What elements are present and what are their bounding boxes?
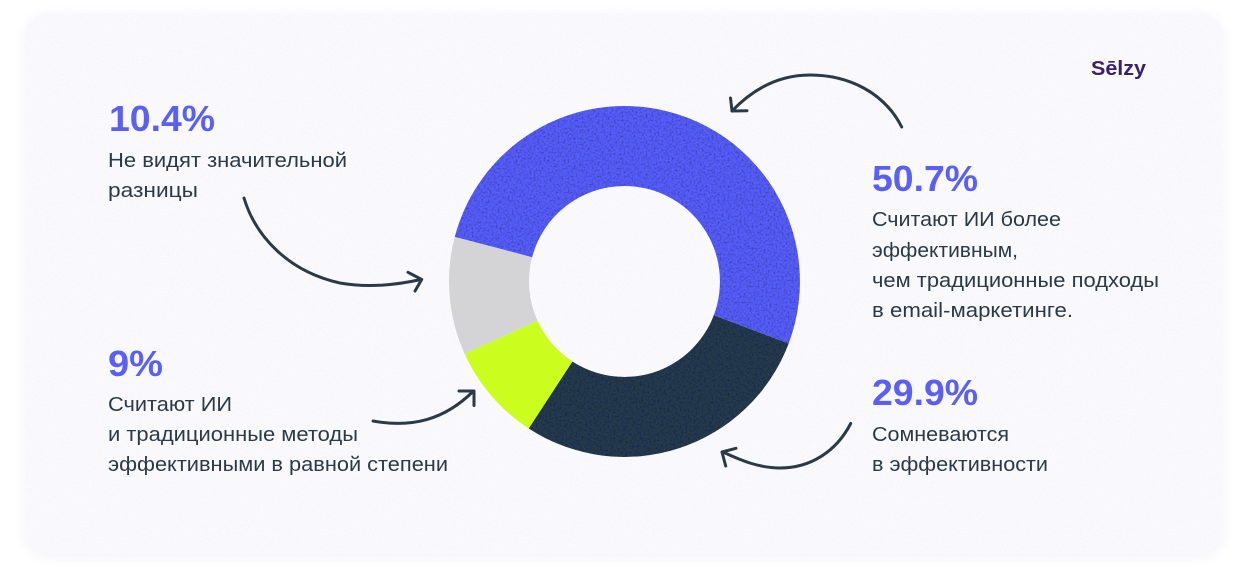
arrow: 29.9% to dark segment	[722, 424, 851, 468]
text block: 9%: эффективными в равной степени	[108, 454, 448, 476]
segment: 9% lime	[465, 321, 572, 428]
text block: 50.7%: в email-маркетинге.	[872, 300, 1073, 322]
text block: 50.7%: эффективным,	[872, 240, 1018, 262]
text block: 50.7%: 50.7%	[872, 158, 978, 199]
text block: 9%	[108, 343, 448, 476]
text block: 50.7%: чем традиционные подходы	[872, 270, 1159, 292]
text block: 10.4%	[108, 98, 347, 202]
text block: 9%: 9%	[108, 343, 163, 384]
arrow: 10.4% to grey segment	[244, 198, 422, 291]
text block: 10.4%: разницы	[108, 180, 198, 202]
segment: 50.7% blue	[455, 106, 800, 344]
text block: 9%: Считают ИИ	[108, 394, 232, 416]
logo: Selzy: Sēlzy	[1091, 58, 1147, 80]
arrow: 9% to lime segment	[373, 391, 474, 423]
text block: 29.9%: в эффективности	[872, 454, 1048, 476]
text block: 29.9%: 29.9%	[872, 372, 978, 413]
text block: 10.4%: Не видят значительной	[108, 150, 347, 172]
segment: 29.9% dark	[529, 315, 789, 457]
text block: 50.7%: Считают ИИ более	[872, 209, 1061, 231]
text block: 29.9%	[872, 372, 1048, 476]
segment: 10.4% grey	[449, 237, 538, 354]
text block: 10.4%: 10.4%	[109, 98, 215, 139]
text block: 50.7%	[872, 158, 1159, 322]
donut chart	[449, 106, 800, 457]
arrow: 50.7% to blue segment	[730, 75, 902, 127]
text block: 29.9%: Сомневаются	[872, 424, 1009, 446]
text block: 9%: и традиционные методы	[108, 424, 358, 446]
